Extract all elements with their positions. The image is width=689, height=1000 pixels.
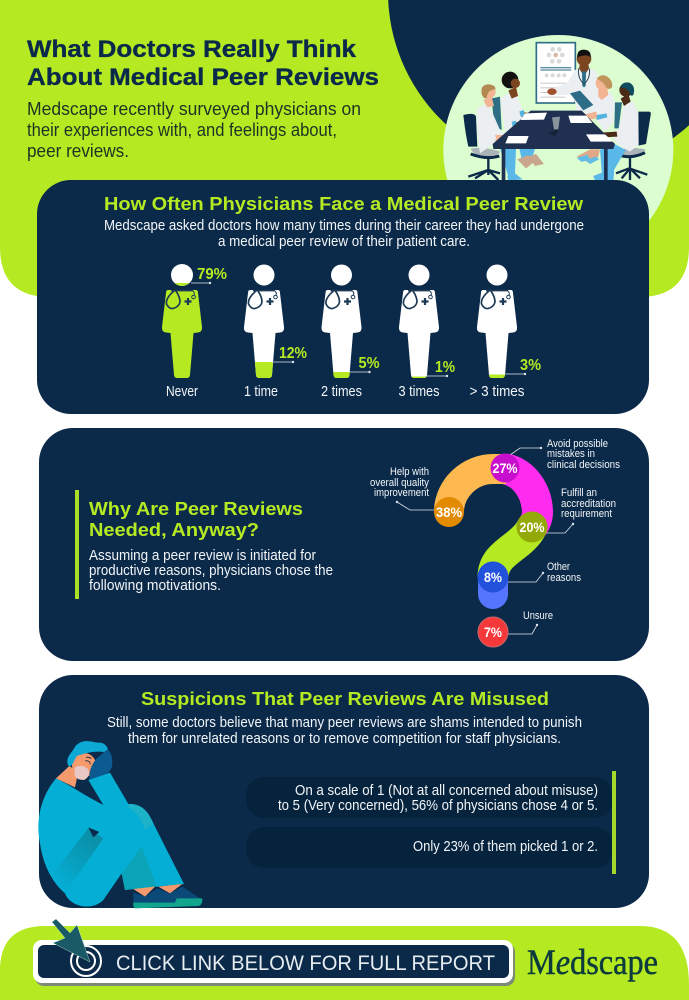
panel heading: Why Are Peer Reviews (89, 498, 303, 519)
panel description: following motivations. (89, 577, 221, 594)
panel description: a medical peer review of their patient care. (218, 233, 470, 250)
label: other reasons (547, 561, 581, 584)
question mark chart (370, 438, 620, 647)
figure: 2 times 5%: 5% (358, 355, 380, 372)
panel heading: How Often Physicians Face a Medical Peer Review (104, 193, 584, 214)
label: accreditation: requirement (561, 508, 612, 520)
label: help with quality: Help with (390, 466, 429, 478)
label: accreditation: Fulfill an (561, 487, 597, 499)
figure: more than 3 times 3%: > 3 times (470, 384, 524, 400)
intro text: their experiences with, and feelings about, (27, 120, 337, 140)
segment: 20% (516, 512, 548, 542)
label: unsure: Unsure (523, 610, 553, 622)
panel heading: Suspicions That Peer Reviews Are Misused (141, 689, 549, 709)
panel description: productive reasons, physicians chose the (89, 562, 333, 579)
label: accreditation (561, 487, 616, 520)
figure: 3 times 1% (398, 264, 455, 400)
top lime header background (0, 0, 689, 297)
accent bar (612, 771, 616, 874)
rear seated doctor right (577, 75, 615, 164)
panel description (89, 547, 333, 594)
panel description: Assuming a peer review is initiated for (89, 547, 316, 564)
segment: 8%: 8% (484, 570, 502, 585)
callout: 56% concerned: to 5 (Very concerned), 56% of physicians chose 4 or 5. (278, 797, 598, 814)
call to action button: CLICK LINK BELOW FOR FULL REPORT (116, 952, 495, 975)
figure: more than 3 times 3% (470, 264, 541, 400)
figure: 1 time 12%: 1 time (244, 384, 278, 400)
panel description (107, 714, 582, 747)
panel description (104, 217, 584, 250)
figure: 3 times 1%: 1% (435, 359, 455, 376)
Medscape logo: Medscape (527, 942, 658, 982)
label: help with quality (370, 466, 429, 499)
title (27, 36, 379, 91)
segment: 7%: 7% (484, 625, 502, 640)
label: avoid mistakes: clinical decisions (547, 459, 620, 471)
panel description: Medscape asked doctors how many times during their career they had undergone (104, 217, 584, 234)
icon: click target and arrow (52, 919, 101, 976)
segment: 7% (478, 617, 508, 647)
seated doctors left with chair (463, 72, 544, 181)
callout: 23% picked 1 or 2: Only 23% of them picked 1 or 2. (413, 838, 598, 855)
segment: 20%: 20% (520, 520, 544, 535)
dark circle top right (388, 0, 689, 172)
figure: 2 times 5% (321, 264, 380, 400)
figure: 3 times 1%: 3 times (398, 384, 440, 400)
title: What Doctors Really Think (27, 36, 357, 63)
intro text (27, 99, 361, 161)
table (493, 111, 615, 182)
segment: 38% (434, 497, 464, 527)
label: help with quality: overall quality (370, 477, 429, 489)
panel heading: Needed, Anyway? (89, 519, 259, 540)
figure: never 79%: 79% (197, 266, 227, 283)
label: help with quality: improvement (374, 487, 429, 499)
segment: 27% (490, 454, 520, 482)
intro text: Medscape recently surveyed physicians on (27, 99, 361, 119)
standing doctor (547, 50, 601, 113)
figure: 1 time 12% (244, 264, 307, 400)
label: other reasons: reasons (547, 572, 581, 584)
panel: how often (37, 180, 649, 414)
panel: suspicions (38, 675, 649, 908)
callout: 23% picked 1 or 2 (246, 827, 613, 868)
figure: 1 time 12%: 12% (279, 345, 307, 362)
segment: 8% (478, 562, 508, 592)
seated doctor far right with chair (593, 82, 651, 181)
illustration: exhausted doctor (38, 741, 202, 908)
panel description: them for unrelated reasons or to remove competition for staff physicians. (128, 730, 561, 747)
illustration: doctors meeting (443, 35, 673, 265)
label: avoid mistakes: mistakes in (547, 448, 595, 460)
intro text: peer reviews. (27, 141, 129, 161)
figure: 2 times 5%: 2 times (321, 384, 362, 400)
figure: never 79% (162, 264, 227, 400)
segment: 27%: 27% (492, 461, 518, 476)
label: other reasons: Other (547, 561, 570, 573)
callout: 56% concerned: On a scale of 1 (Not at all concerned about misuse) (295, 782, 598, 799)
segment: 38%: 38% (436, 505, 462, 520)
label: avoid mistakes: Avoid possible (547, 438, 608, 450)
label: accreditation: accreditation (561, 498, 616, 510)
panel heading (89, 498, 303, 540)
panel description: Still, some doctors believe that many peer reviews are shams intended to punish (107, 714, 582, 731)
label: avoid mistakes (547, 438, 620, 471)
panel: why needed (39, 428, 649, 661)
bottom lime band (0, 926, 689, 1000)
figure: never 79%: Never (166, 384, 198, 400)
accent bar (75, 490, 79, 599)
figure: more than 3 times 3%: 3% (520, 357, 541, 374)
title: About Medical Peer Reviews (27, 64, 379, 91)
call to action button (33, 940, 515, 986)
callout: 56% concerned (246, 777, 613, 818)
